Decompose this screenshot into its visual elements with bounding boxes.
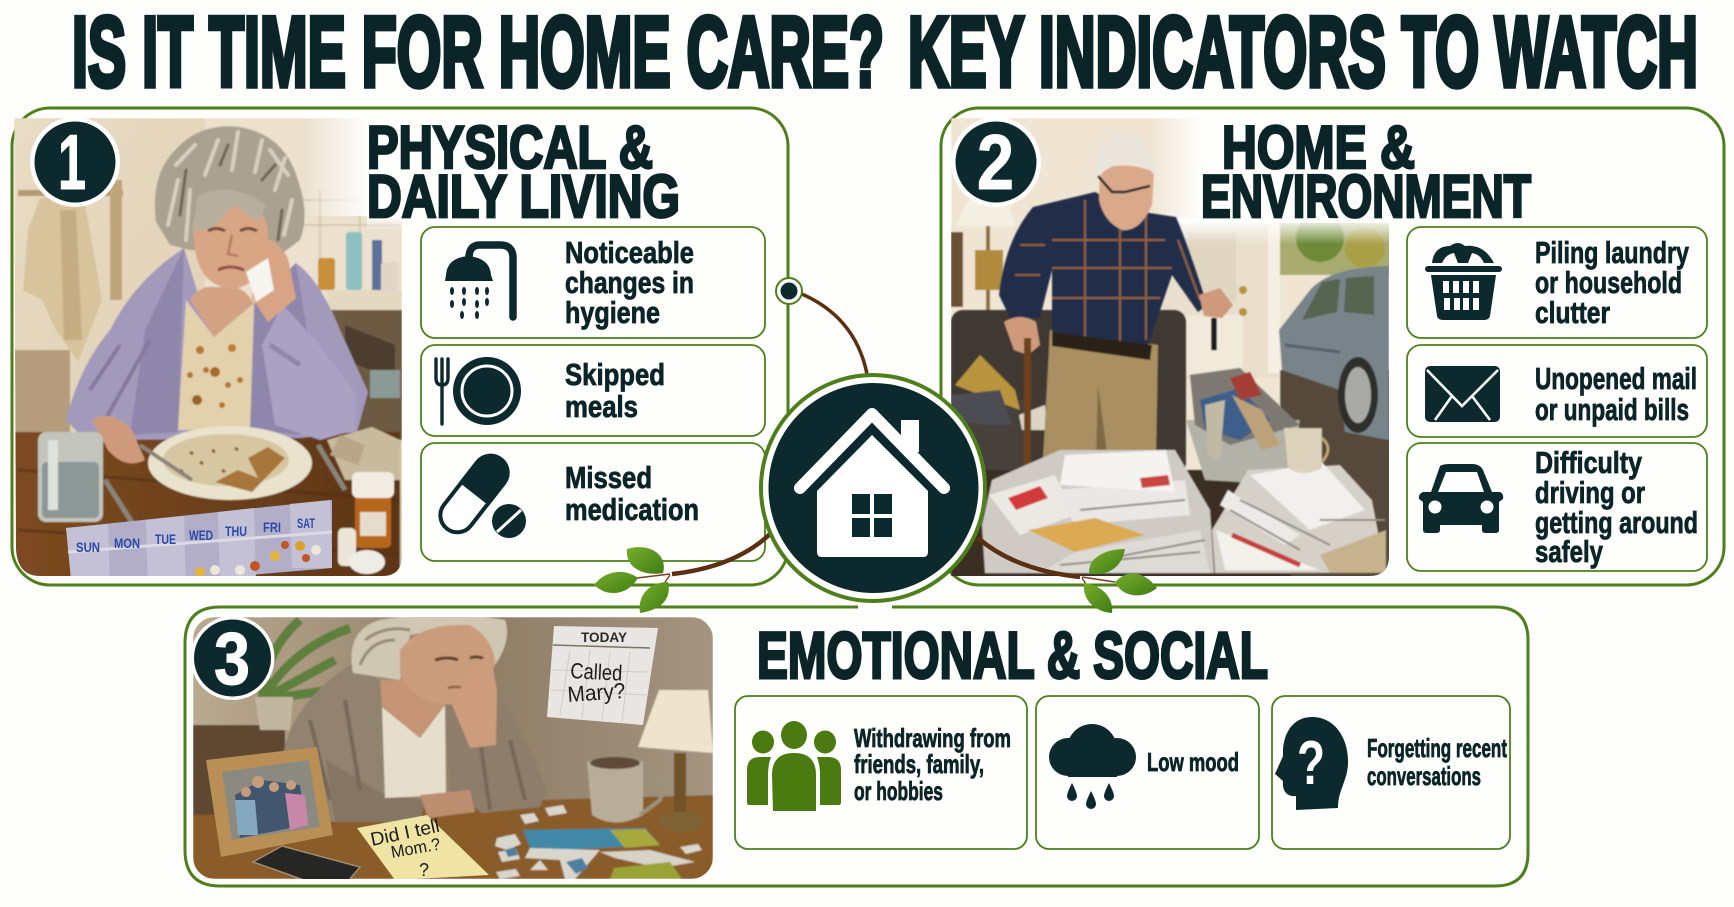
text: forgetting recent conversations <box>1367 733 1507 791</box>
pill organizer: TUE <box>155 531 176 547</box>
pill organizer: WED <box>189 527 213 543</box>
panel: home and environment <box>941 108 1724 585</box>
text: noticeable changes in hygiene: Noticeable <box>565 235 694 270</box>
calendar <box>547 626 658 725</box>
hand and forearm <box>452 652 497 748</box>
icon: plate and fork <box>436 357 521 425</box>
card: skipped meals <box>421 345 765 436</box>
center house emblem <box>761 375 985 601</box>
card: laundry clutter <box>1407 227 1707 338</box>
text: withdrawing from friends, family, or hobbies <box>854 723 1011 806</box>
puzzle <box>523 828 660 850</box>
connector: top vine with dot <box>776 278 867 374</box>
text: missed medication: Missed <box>565 460 652 495</box>
head <box>1099 165 1154 230</box>
text: withdrawing from friends, family, or hobbies: or hobbies <box>854 776 943 806</box>
hands and cane <box>1004 317 1040 355</box>
text: piling laundry or household clutter: clutter <box>1535 295 1610 330</box>
text: piling laundry or household clutter: Piling laundry <box>1535 235 1690 270</box>
laundry basket <box>1186 420 1300 485</box>
connector: right vine with leaves <box>978 538 1157 613</box>
card: unopened mail <box>1407 345 1707 437</box>
panel 1 frame <box>12 108 788 585</box>
number badge 2: 2 <box>977 118 1014 206</box>
text: withdrawing from friends, family, or hobbies: friends, family, <box>854 749 984 779</box>
text: missed medication: medication <box>565 492 699 527</box>
mug <box>1284 428 1322 473</box>
robe <box>66 248 368 440</box>
chemise <box>178 300 254 430</box>
text: difficulty driving or getting around safely: driving or <box>1535 475 1645 510</box>
text: noticeable changes in hygiene: hygiene <box>565 295 660 330</box>
text: piling laundry or household clutter <box>1535 235 1690 330</box>
pill organizer: MON <box>114 535 140 551</box>
panel: emotional and social <box>185 607 1528 886</box>
plate <box>148 426 312 500</box>
connector: left vine with leaves <box>594 534 770 613</box>
phone <box>253 846 360 880</box>
mail pile left <box>982 450 1214 573</box>
card: forgetting conversations <box>1272 696 1510 849</box>
card: missed medication <box>421 443 765 561</box>
photo: man with cane among unopened mail <box>951 118 1390 580</box>
face <box>400 625 495 705</box>
card: difficulty driving <box>1407 443 1707 571</box>
hair <box>155 126 305 255</box>
hair <box>352 615 507 680</box>
heading: physical and daily living: PHYSICAL & <box>367 114 653 181</box>
heading: home and environment <box>1201 114 1531 230</box>
text: piling laundry or household clutter: or household <box>1535 265 1682 300</box>
icon: house <box>800 414 944 557</box>
icon: car <box>1419 464 1503 533</box>
number badge 2 <box>951 117 1041 207</box>
shirt <box>999 192 1207 345</box>
text: skipped meals: meals <box>565 389 638 424</box>
glass <box>38 432 103 522</box>
calendar: Mary? <box>567 678 626 707</box>
text: forgetting recent conversations: conversations <box>1367 761 1481 791</box>
panel 2 frame <box>941 108 1724 585</box>
text: difficulty driving or getting around safely <box>1535 445 1698 569</box>
sofa <box>951 310 1186 475</box>
icon: head with question mark <box>1275 717 1348 810</box>
icon: head with question mark: ? <box>1297 729 1325 798</box>
text: skipped meals <box>565 357 665 424</box>
lamp <box>638 690 713 753</box>
icon: people <box>747 721 841 811</box>
trousers <box>1043 330 1158 460</box>
leaves <box>1084 549 1157 613</box>
pill organizer: FRI <box>263 519 281 535</box>
pill organizer: SAT <box>297 515 315 531</box>
text: skipped meals: Skipped <box>565 357 665 392</box>
sticky note: Mom.? <box>389 835 442 862</box>
number badge 1: 1 <box>58 118 86 206</box>
number badge 3 <box>190 616 274 700</box>
text: difficulty driving or getting around safely: Difficulty <box>1535 445 1643 480</box>
number badge 3: 3 <box>214 617 250 700</box>
hand and tissue <box>252 238 296 322</box>
calendar: TODAY <box>581 629 628 645</box>
icon: laundry basket <box>1425 243 1502 320</box>
photo: woman with calendar and puzzle <box>193 615 713 880</box>
mail pile right <box>1212 465 1386 573</box>
sticky note: Did I tell <box>369 816 442 851</box>
mug <box>587 757 643 822</box>
leaves <box>594 547 669 613</box>
table <box>193 795 713 879</box>
face <box>192 198 268 288</box>
wall fade <box>1150 118 1390 244</box>
panel: physical and daily living <box>12 108 788 590</box>
icon: envelope <box>1425 366 1500 422</box>
heading: home and environment: HOME & <box>1222 114 1415 181</box>
pill organizer: THU <box>225 523 247 539</box>
cardigan <box>283 665 384 823</box>
card: low mood <box>1036 696 1259 849</box>
icon: rain cloud <box>1049 724 1136 809</box>
heading: home and environment: ENVIRONMENT <box>1201 163 1531 230</box>
card: withdrawing <box>735 696 1027 849</box>
undershirt <box>382 705 446 798</box>
text: noticeable changes in hygiene: changes in <box>565 265 694 300</box>
text: unopened mail or unpaid bills <box>1535 361 1697 427</box>
text: missed medication <box>565 460 699 527</box>
heading: physical and daily living <box>367 114 680 230</box>
text: low mood: Low mood <box>1147 747 1239 777</box>
card: hygiene <box>421 227 765 338</box>
text: noticeable changes in hygiene <box>565 235 694 330</box>
panel 3 frame <box>185 607 1528 886</box>
heading: physical and daily living: DAILY LIVING <box>367 163 680 230</box>
number badge 1 <box>30 117 120 207</box>
sticky note: ? <box>419 860 429 880</box>
photo: woman at table with pill organizer <box>14 118 403 590</box>
text: difficulty driving or getting around safely: safely <box>1535 534 1604 569</box>
icon: pills <box>432 446 526 540</box>
calendar: Called <box>570 658 623 686</box>
pill organizer: SUN <box>76 539 100 555</box>
pill organizer <box>66 500 332 576</box>
heading: emotional and social: EMOTIONAL & SOCIAL <box>757 618 1268 692</box>
icon: shower <box>445 245 513 319</box>
picture frame <box>206 747 333 857</box>
wall fade <box>312 118 402 228</box>
text: forgetting recent conversations: Forgetting recent <box>1367 733 1507 763</box>
sticky note <box>357 815 489 880</box>
text: withdrawing from friends, family, or hobbies: Withdrawing from <box>854 723 1011 753</box>
